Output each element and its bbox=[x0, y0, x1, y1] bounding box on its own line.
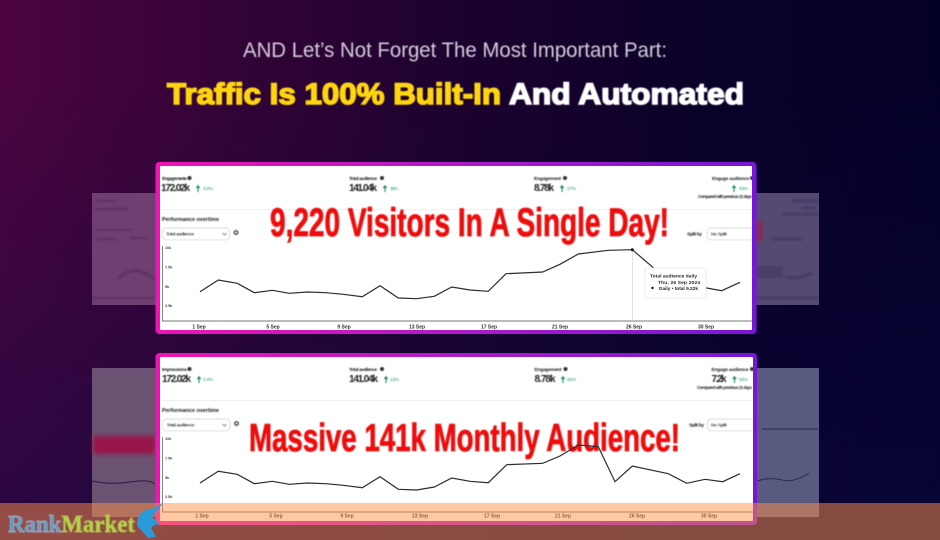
logo wordmark: RankMarket bbox=[8, 512, 135, 538]
line chart: monthly audience: 9 Sep bbox=[340, 514, 354, 520]
panel: monthly audience chart bbox=[156, 353, 758, 525]
subtitle: AND Let’s Not Forget The Most Important Part: bbox=[243, 39, 667, 62]
line chart: monthly audience: 26 Sep bbox=[629, 514, 645, 520]
stats row: 8.78k bbox=[534, 183, 554, 194]
line chart: daily audience: 5 Sep bbox=[266, 324, 280, 330]
line chart: monthly audience: 10k bbox=[165, 437, 172, 441]
tooltip: Daily • total 9.22k bbox=[659, 286, 698, 292]
line chart: daily audience: 10k bbox=[165, 246, 172, 250]
stats row: 93% bbox=[739, 186, 749, 192]
stats row: 3.4% bbox=[203, 377, 214, 383]
ghost panel: top right bbox=[756, 193, 819, 305]
panel: daily visitors chart bbox=[156, 162, 757, 334]
chart controls: Total audience bbox=[166, 232, 194, 238]
stats row: 8.78k bbox=[534, 374, 556, 385]
stats row bbox=[161, 176, 754, 199]
chart controls bbox=[162, 217, 757, 240]
footer band bbox=[0, 503, 940, 540]
logo icon: blue unicorn head bbox=[137, 503, 163, 538]
chart controls: No Split bbox=[711, 422, 727, 428]
line chart: daily audience: 1 Sep bbox=[192, 324, 206, 330]
line chart: daily audience: 5k bbox=[165, 285, 170, 289]
ghost panel: top left bbox=[92, 193, 156, 305]
stats row: Impressions bbox=[162, 367, 187, 373]
ghost panel: bottom right bbox=[756, 368, 819, 517]
chart controls: Performance overtime bbox=[162, 217, 219, 223]
stats row: Engage audience bbox=[712, 367, 749, 373]
line chart: monthly audience: 1 Sep bbox=[195, 514, 209, 520]
stats row: 18% bbox=[390, 186, 399, 192]
stats row: 27% bbox=[567, 186, 577, 192]
stats row: Engagements bbox=[162, 176, 187, 182]
line chart: daily audience: 13 Sep bbox=[409, 324, 425, 330]
line chart: monthly audience: 17 Sep bbox=[484, 514, 500, 520]
chart controls: No Split bbox=[711, 232, 727, 238]
headline: 9,220 visitors: 9,220 Visitors In A Single Day! bbox=[270, 201, 669, 245]
chart controls: Split by bbox=[689, 422, 704, 428]
stats row: 141.04k bbox=[349, 183, 377, 194]
line chart: daily audience: 7.5k bbox=[165, 266, 173, 270]
tooltip: Total audience daily bbox=[650, 274, 697, 280]
line chart: daily audience bbox=[162, 246, 752, 330]
line chart: monthly audience: 21 Sep bbox=[555, 514, 571, 520]
stats row: 13% bbox=[390, 377, 400, 383]
stats row: Compared with previous 21 days bbox=[697, 385, 753, 390]
line chart: daily audience: 2.5k bbox=[165, 304, 173, 308]
stats row: Engage audience bbox=[712, 176, 749, 182]
chart controls: Performance overtime bbox=[162, 408, 219, 414]
line chart: monthly audience: 5k bbox=[165, 476, 170, 480]
line chart: monthly audience bbox=[162, 437, 753, 520]
line chart: monthly audience: 30 Sep bbox=[701, 514, 717, 520]
chart controls: Split by bbox=[687, 232, 702, 238]
stats row: 3.4% bbox=[203, 186, 214, 192]
title: Traffic Is 100% Built-In bbox=[167, 78, 501, 111]
line chart: monthly audience: 7.5k bbox=[165, 456, 173, 460]
chart controls bbox=[162, 408, 758, 431]
line chart: daily audience: 17 Sep bbox=[481, 324, 497, 330]
stats row: Engagement bbox=[534, 176, 561, 182]
stats row: Total audience bbox=[349, 176, 377, 182]
line chart: daily audience: 9 Sep bbox=[337, 324, 351, 330]
logo: RankMarket bbox=[8, 503, 163, 538]
stats row: 92% bbox=[567, 377, 577, 383]
title bbox=[167, 78, 744, 111]
stats row bbox=[162, 367, 754, 390]
title: And Automated bbox=[509, 78, 744, 111]
tooltip bbox=[645, 268, 706, 298]
line chart: monthly audience: 5 Sep bbox=[269, 514, 283, 520]
stats row: Compared with previous 21 days bbox=[698, 194, 753, 199]
line chart: monthly audience: 2.5k bbox=[165, 495, 173, 499]
line chart: daily audience: 30 Sep bbox=[698, 324, 714, 330]
stats row: 141.04k bbox=[349, 374, 378, 385]
stats row: Engagement bbox=[534, 367, 562, 373]
stats row: 7.2k bbox=[712, 374, 727, 385]
chart controls: Total audience bbox=[166, 422, 195, 428]
stats row: 172.02k bbox=[161, 183, 190, 194]
stats row: Total audience bbox=[349, 367, 377, 373]
line chart: daily audience: 21 Sep bbox=[552, 324, 568, 330]
line chart: monthly audience: 13 Sep bbox=[412, 514, 428, 520]
stats row: 172.02k bbox=[162, 374, 191, 385]
headline: massive 141k: Massive 141k Monthly Audience! bbox=[249, 417, 680, 460]
line chart: daily audience: 26 Sep bbox=[626, 324, 642, 330]
stats row: 93% bbox=[739, 377, 749, 383]
ghost panel: bottom left bbox=[92, 368, 156, 517]
tooltip: Thu, 26 Sep 2024 bbox=[658, 280, 700, 286]
